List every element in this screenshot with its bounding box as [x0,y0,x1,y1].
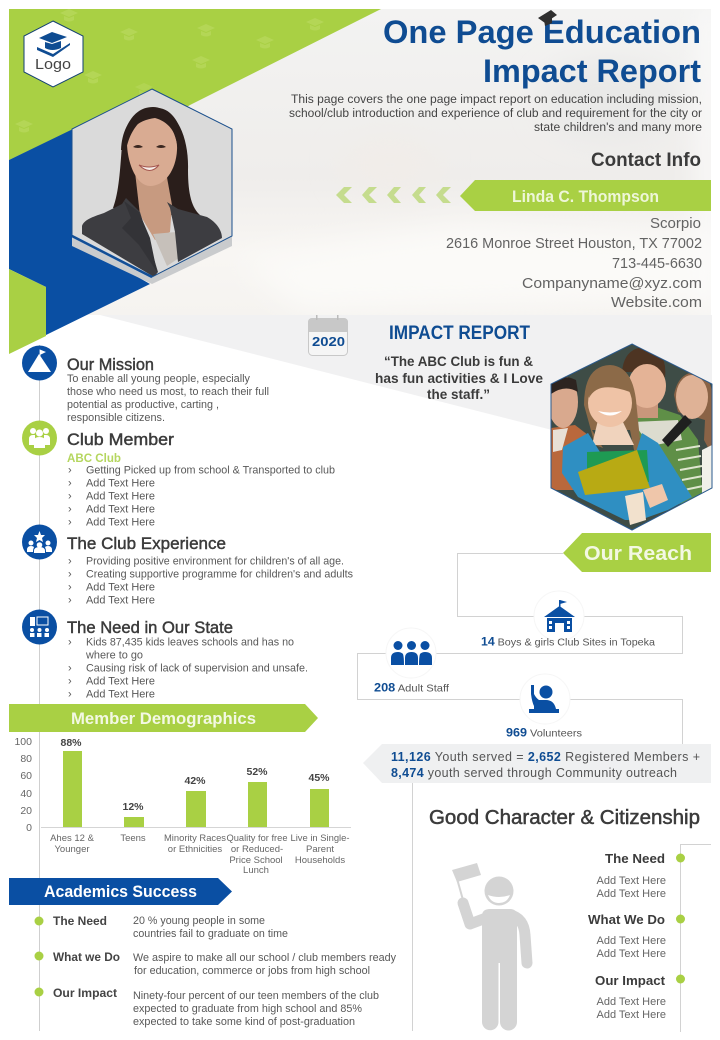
light gray impact report panel [100,315,712,430]
y axis labels: 60 [20,770,32,782]
right timeline line [680,844,711,1032]
bullet list: › [68,556,72,568]
icon: calendar 2020: 2020 [312,334,345,349]
heading: The Need in Our State [67,618,233,637]
bullet list: › [68,689,72,701]
club experience section [22,524,353,607]
contact details: Scorpio [650,215,701,232]
citizenship the need: Add Text Here [596,888,666,900]
value labels: 88% [60,737,82,749]
tall boy hair and face [622,347,665,378]
contact details: 713-445-6630 [612,255,702,272]
y axis labels: 80 [20,753,32,765]
description: state children's and many more [534,120,702,134]
academics success banner [9,878,232,905]
academics our impact: expected to graduate from high school and 85% [133,1003,362,1015]
bullet list: › [68,569,72,581]
heading: Our Mission [67,355,154,374]
member demographics banner [9,704,318,732]
reach connector line [358,554,682,744]
bullet list [68,464,335,528]
left student [551,425,588,490]
lowered arm [510,915,527,963]
citizenship what we do: Add Text Here [596,935,666,947]
value labels: 12% [122,801,144,813]
left timeline line [38,345,40,1031]
blouse [153,232,179,266]
bullet list [68,637,308,701]
value labels: 45% [308,772,330,784]
club member section [22,420,335,528]
green book [587,450,649,482]
bullet list: › [68,478,72,490]
impact report heading: IMPACT REPORT [389,323,530,344]
citizenship the need: The Need [605,851,665,866]
title: One Page Education [383,14,701,50]
bullet list: Kids 87,435 kids leaves schools and has no [86,637,294,649]
icon: person with flag [452,863,527,1030]
y axis labels: 100 [14,736,32,748]
academics the need [34,914,288,940]
club sites stat [481,591,655,649]
bullet list: › [68,595,72,607]
academics what we do [34,950,396,977]
background photo [88,9,711,315]
y axis labels: 0 [26,822,32,834]
citizenship the need: Add Text Here [596,875,666,887]
bullet list: › [68,637,72,649]
tall boy hoodie [638,408,702,504]
decorative chevrons [336,187,451,203]
contact details [446,215,702,311]
quote: has fun activities & I Love [375,371,543,386]
bullet list: › [68,582,72,594]
hair [113,107,200,215]
value labels: 42% [184,775,206,787]
bullet list: Add Text Here [86,478,155,490]
citizenship the need [596,851,685,900]
yellow book [578,450,650,495]
title [383,10,701,89]
y axis labels [14,736,32,834]
icon: graduation cap [37,32,70,57]
text: 208 Adult Staff [374,681,449,695]
youth served callout: 11,126 Youth served = 2,652 Registered Members + [391,750,700,764]
bars [63,751,329,827]
academics our impact [34,986,379,1028]
our reach banner: Our Reach [584,543,692,565]
academics the need: 20 % young people in some [133,915,265,927]
category labels: or Reduced- [231,844,283,855]
citizenship our impact [595,973,685,1021]
category labels: Minority Races [164,833,226,844]
neck and chest [135,172,172,240]
academics our impact: Our Impact [53,986,117,1000]
blue shape [9,129,150,335]
category labels: Parent [306,844,334,855]
title: Impact Report [483,53,701,89]
cuff and hand [625,492,646,525]
good character heading: Good Character & Citizenship [429,807,700,829]
bullet list: Add Text Here [86,516,155,528]
head [484,876,514,906]
bullet list: Add Text Here [86,582,155,594]
category labels: Quality for free [226,833,288,844]
academics success banner: Academics Success [44,882,197,901]
academics what we do: We aspire to make all our school / club members ready [133,952,396,964]
description [289,92,702,134]
academics our impact: expected to take some kind of post-graduation [133,1016,355,1028]
icon: mountain flag [22,346,57,380]
bullet list: Add Text Here [86,490,155,502]
category labels [50,833,350,876]
academics the need: The Need [53,914,107,928]
icon: staff [391,641,432,665]
academics the need: countries fail to graduate on time [133,928,288,940]
logo [24,21,83,87]
center girl face [588,387,632,427]
bullet list: › [68,490,72,502]
icon: title cap [538,10,557,26]
description: This page covers the one page impact report on education including mission, [291,92,702,106]
body: those who need us most, to reach their full [67,386,269,398]
youth served callout [363,744,711,783]
name banner [460,180,711,211]
bullet list: Add Text Here [86,595,155,607]
text: 14 Boys & girls Club Sites in Topeka [481,635,655,649]
bullet list [68,556,353,607]
our mission section [22,346,269,424]
body: responsible citizens. [67,412,165,424]
adult staff stat [374,628,449,695]
green corner shape [9,9,381,160]
smile [139,165,159,170]
description: school/club introduction and experience of club and requirement for the city or [289,106,702,120]
torso and legs [482,909,517,1030]
category labels: Ahes 12 & [50,833,95,844]
bullet list: › [68,516,72,528]
citizenship what we do [588,912,685,960]
bullet list: › [68,663,72,675]
heading: Club Member [67,430,174,449]
category labels: or Ethnicities [168,844,222,855]
body [67,373,269,424]
academics what we do: for education, commerce or jobs from high school [134,965,370,977]
y axis labels: 40 [20,788,32,800]
category labels: Lunch [243,865,269,876]
center girl hair [584,365,640,450]
icon: calendar 2020 [308,315,348,356]
logo text: Logo [35,56,71,73]
bullet list: › [68,464,72,476]
youth served callout: 8,474 youth served through Community outreach [391,766,677,780]
bullet list: › [68,504,72,516]
category labels: Live in Single- [290,833,350,844]
need in our state section [22,610,308,701]
vertical divider [412,783,414,1031]
category labels: Households [295,855,345,866]
citizenship our impact: Add Text Here [596,1009,666,1021]
y axis labels: 20 [20,805,32,817]
flag [452,863,481,882]
body: potential as productive, carting , [67,399,219,411]
quote: the staff.” [427,387,490,402]
academics what we do: What we Do [53,950,120,964]
icon: classroom [22,610,57,644]
citizenship our impact: Our Impact [595,973,666,988]
center girl neck [593,422,634,445]
bullet list: Causing risk of lack of supervision and unsafe. [86,663,308,675]
category labels: Younger [54,844,90,855]
value labels: 52% [246,766,268,778]
member demographics banner: Member Demographics [71,709,256,728]
icon: volunteer [529,685,559,713]
bullet list: Add Text Here [86,504,155,516]
portrait hexagon [72,89,232,284]
contact details: Companyname@xyz.com [522,275,702,292]
face [127,118,177,186]
citizenship what we do: What We Do [588,912,665,927]
bullet list: where to go [85,650,143,662]
academics our impact: Ninety-four percent of our teen members of the club [133,990,379,1002]
quote [375,354,543,402]
text: 969 Volunteers [506,726,582,740]
icon: team star [22,524,57,560]
bullet list: Getting Picked up from school & Transported to club [86,464,335,476]
students hexagon photo [548,344,712,530]
right student [674,373,712,447]
contact details: Website.com [611,294,702,311]
category labels: Teens [120,833,146,844]
bullet list: Add Text Here [86,676,155,688]
category labels: Price School [229,855,283,866]
heading: The Club Experience [67,534,226,553]
hair fringe [121,122,138,150]
bullet list: › [68,676,72,688]
our reach banner [563,533,711,572]
bullet list: Creating supportive programme for children's and adults [86,569,353,581]
jacket [82,198,222,277]
contact info heading: Contact Info [591,150,701,171]
volunteers stat [506,674,582,740]
blue sweater [562,433,692,520]
citizenship what we do: Add Text Here [596,948,666,960]
icon: school [544,600,575,632]
bullet list: Providing positive environment for children's of all age. [86,556,344,568]
icon: members [22,420,57,456]
backpack strap [662,415,692,447]
bar chart [14,736,351,876]
hoodie stripes [676,446,703,490]
value labels [60,737,330,813]
name banner: Linda C. Thompson [512,187,659,206]
green lower shape [9,269,46,354]
citizenship our impact: Add Text Here [596,996,666,1008]
bullet list: Add Text Here [86,689,155,701]
contact details: 2616 Monroe Street Houston, TX 77002 [446,235,702,252]
raised arm [463,903,486,924]
body: To enable all young people, especially [67,373,250,385]
sub-heading: ABC Club [67,451,121,465]
quote: “The ABC Club is fun & [384,354,533,369]
